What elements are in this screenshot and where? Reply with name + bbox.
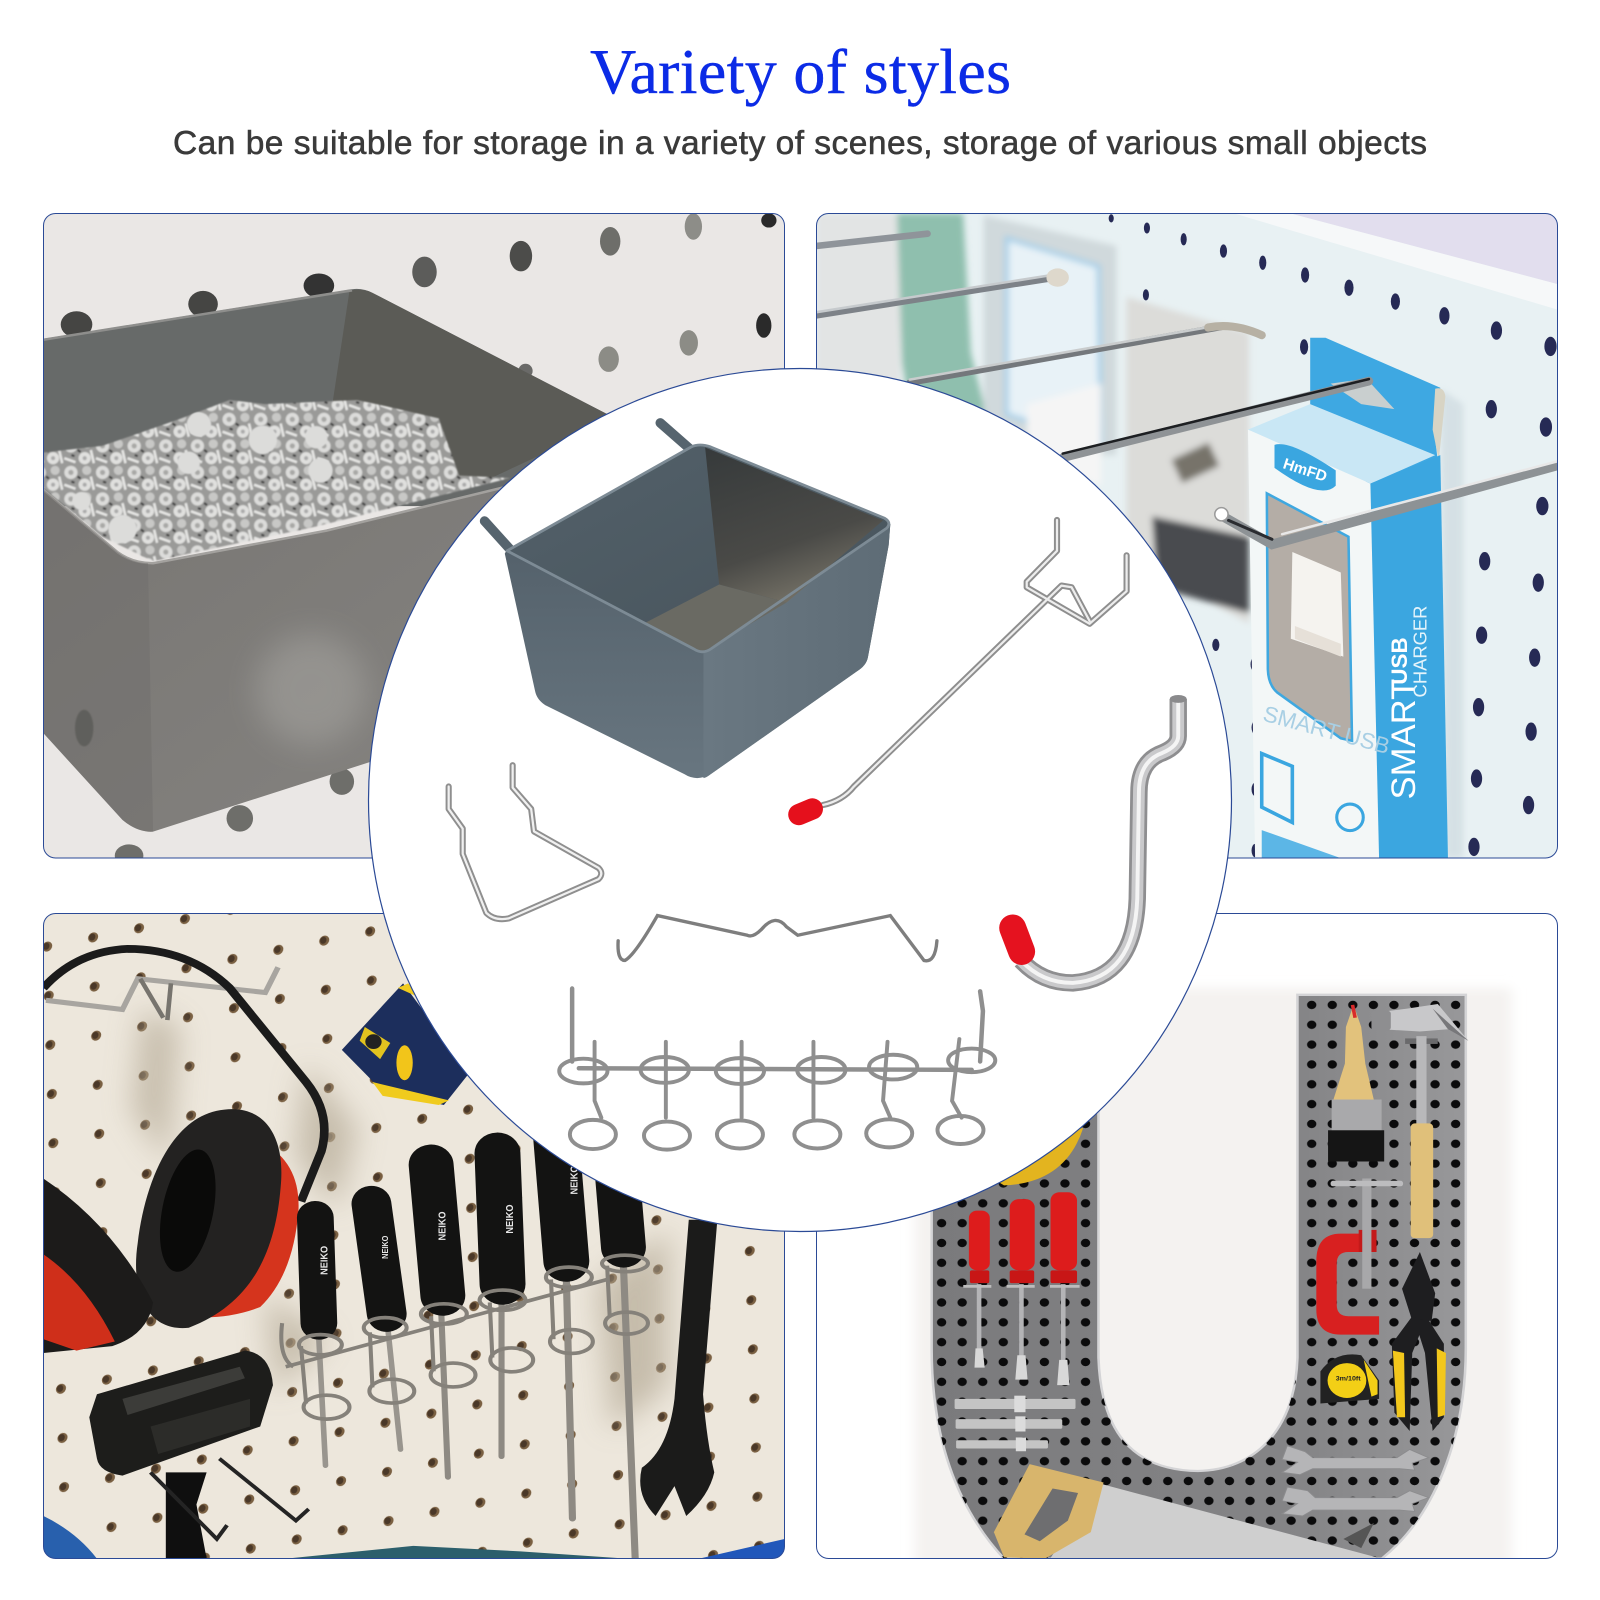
wrench [640, 1220, 717, 1516]
box front text: SMART USB [1260, 701, 1393, 759]
panel: screwdrivers, ear muffs and mallet on pegboard [43, 913, 786, 1560]
tape measure: 3m/10ft [1336, 1376, 1361, 1382]
pegboard dots [1109, 214, 1557, 857]
mallet [89, 1351, 273, 1559]
pliers [1392, 1252, 1446, 1431]
grey plastic bin [485, 423, 890, 778]
objects along bottom edge [43, 1516, 97, 1559]
right ear cup [136, 1109, 299, 1328]
ear muff headband [43, 949, 324, 1201]
box window [1267, 493, 1352, 741]
U-shaped board [932, 995, 1466, 1559]
panel: hooks holding packages on pegboard [816, 213, 1558, 858]
panel: product circle [368, 368, 1232, 1232]
soft photo backdrop [915, 988, 1512, 1585]
blue charger box [1248, 338, 1463, 858]
panel 2 frame [816, 214, 1558, 858]
screwdrivers [315, 1137, 635, 1559]
bin front body [43, 486, 510, 832]
long hook with red tip [799, 520, 1127, 815]
lavender wall and board edge [1290, 213, 1558, 284]
handle brand labels: NEIKO [437, 1211, 449, 1240]
box rotated text: SMART [1385, 679, 1423, 799]
panel 3 frame [44, 914, 784, 1558]
wrenches [1282, 1446, 1429, 1516]
thin wire holder [618, 916, 937, 961]
handle brand labels: NEIKO [504, 1204, 516, 1234]
handle brand labels: NEIKO [569, 1165, 581, 1195]
left ear cup [43, 1178, 153, 1353]
panel: plastic bin holding screws on pegboard [43, 213, 785, 867]
ring rack [559, 989, 995, 1150]
title: Variety of styles [590, 36, 1011, 107]
panel 4 frame [816, 914, 1558, 1558]
handle brand labels: NEIKO [380, 1236, 390, 1259]
box rotated text: CHARGER [1410, 606, 1431, 697]
wire hook for headband [46, 967, 278, 1009]
large J hook with red cap [1013, 695, 1187, 983]
pegboard holes [61, 213, 777, 867]
hand saw [994, 1464, 1382, 1559]
paint brush [1328, 1005, 1384, 1161]
wall shadows [133, 1009, 668, 1431]
tape measure [342, 983, 469, 1105]
blurred packages in background [816, 213, 1249, 623]
subtitle: Can be suitable for storage in a variety of scenes, storage of various small objects [173, 125, 1427, 162]
pile of screws [43, 400, 510, 561]
V-shaped pegboard clip [449, 765, 601, 919]
bin inner walls [43, 289, 617, 506]
claw hammer [1371, 1004, 1468, 1238]
bin side shading [43, 490, 153, 832]
wire hooks [816, 234, 1558, 544]
box rotated text [1391, 606, 1426, 798]
yellow tool [1000, 1128, 1084, 1186]
handle brand labels [319, 1165, 581, 1275]
drill bits [955, 1396, 1076, 1451]
red screwdrivers [963, 1192, 1080, 1385]
tape measure [1320, 1354, 1379, 1403]
U board holes [932, 995, 1466, 1559]
panel 1 frame [44, 214, 784, 858]
box logo: HmFD [1281, 455, 1329, 486]
handle brand labels: NEIKO [319, 1245, 331, 1275]
worn patch on bin [255, 634, 367, 746]
red C clamp [1316, 1178, 1403, 1335]
box rotated text: USB [1387, 637, 1412, 685]
black wire hooks under mallet [151, 1459, 309, 1539]
ring rack [281, 1255, 648, 1419]
screw highlights [72, 412, 333, 543]
cream pegboard holes [43, 913, 786, 1560]
panel: tools on U-shaped pegboard [916, 988, 1511, 1558]
